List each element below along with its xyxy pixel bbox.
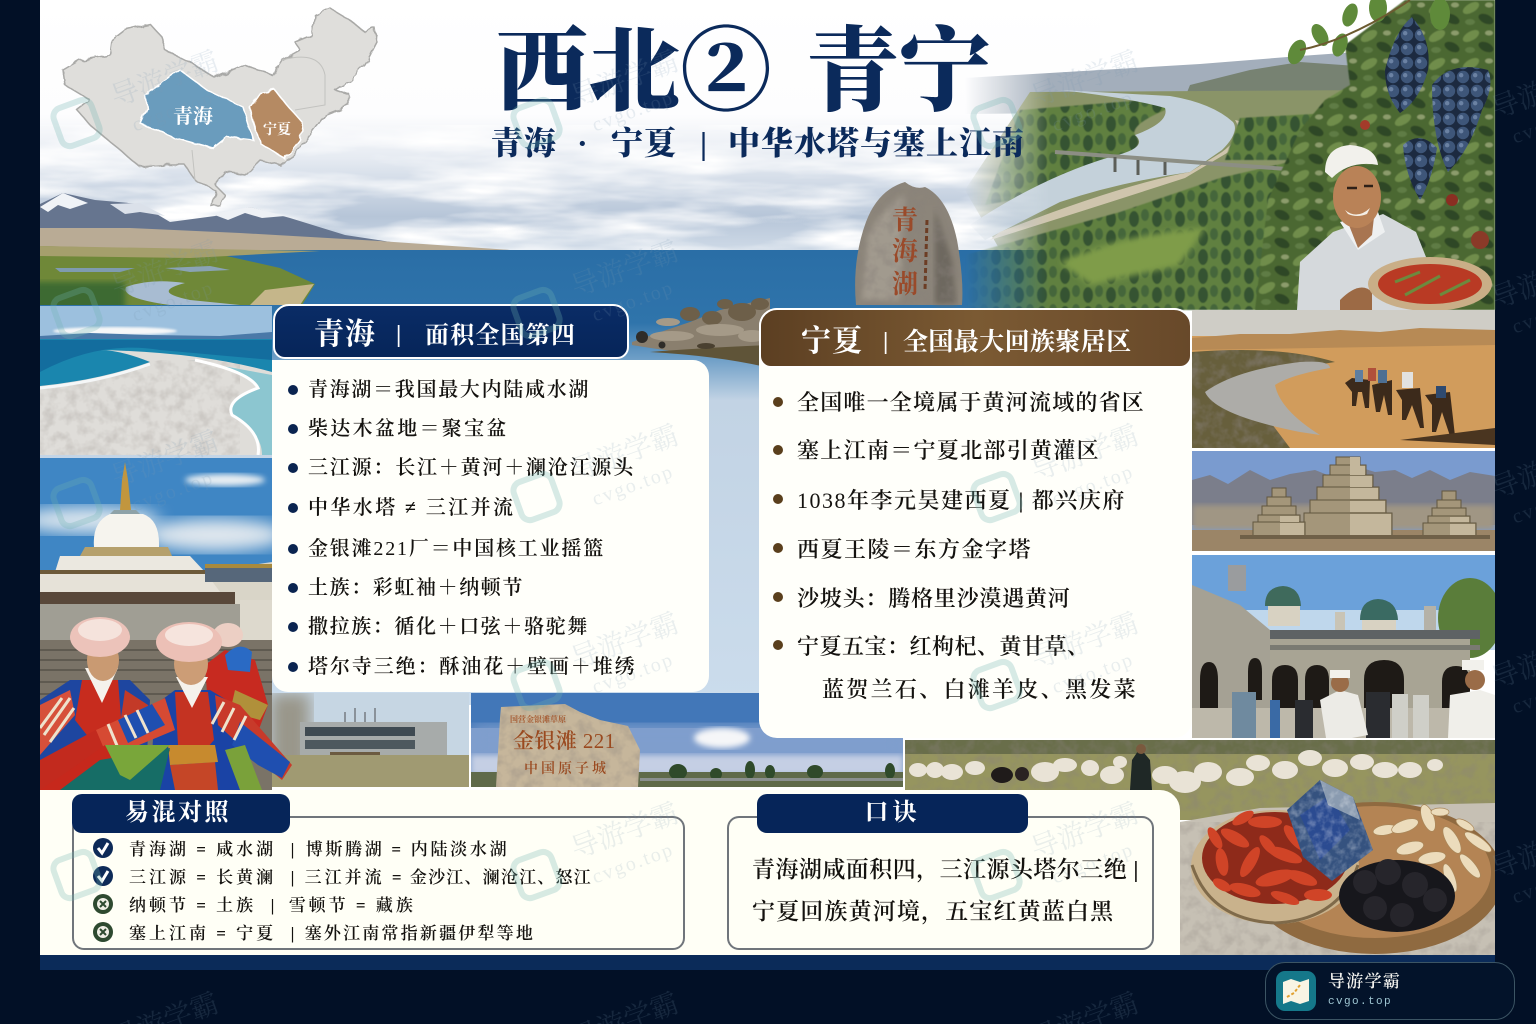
watermarks: cvgo.top [1049, 86, 1137, 136]
Qinghai list: 青海湖＝我国最大内陆咸水湖 [308, 379, 590, 401]
Ningxia list: 全国唯一全境属于黄河流域的省区 [797, 390, 1145, 415]
location map of China [63, 8, 377, 207]
watermarks: 导游学霸 [1027, 45, 1143, 113]
Qinghai header: 青海 [314, 318, 376, 351]
heading: confusable pairs: 易混对照 [125, 800, 231, 826]
comparison lines: 三江源 = 长黄澜 | 三江并流 = 金沙江、澜沧江、怒江 [129, 868, 592, 887]
stupa [55, 462, 205, 572]
photo: salt lake [40, 306, 272, 455]
stone monument: Qinghai Lake: 海 [892, 237, 918, 266]
watermarks: 导游学霸 [567, 419, 683, 487]
Ningxia region [250, 90, 303, 159]
panel: confusable pairs [72, 816, 685, 950]
icon: cross [93, 922, 113, 942]
watermarks: 导游学霸 [1027, 607, 1143, 675]
photo: Ta'er temple and Tu dancers [40, 458, 292, 790]
watermarks: 导游学霸 [567, 45, 683, 113]
watermarks: 导游学霸 [107, 45, 223, 113]
Qinghai list: 塔尔寺三绝：酥油花＋壁画＋堆绣 [308, 656, 636, 678]
Qinghai header [273, 304, 629, 359]
Qinghai panel body [272, 360, 709, 692]
subtitle: · [577, 125, 589, 161]
photo: desert, Yellow River and camels [1192, 310, 1495, 448]
grape clusters [1385, 17, 1429, 113]
comparison lines: 青海湖 = 咸水湖 | 博斯腾湖 = 内陆淡水湖 [129, 840, 509, 859]
watermarks: cvgo.top [589, 648, 677, 698]
watermarks: 导游学霸 [567, 235, 683, 303]
watermarks: 导游学霸 [107, 425, 223, 493]
Qinghai list: 土族：彩虹袖＋纳顿节 [308, 577, 524, 599]
title: 西北② [496, 21, 772, 123]
photo: 221 factory [272, 693, 469, 787]
subtitle: 青海 [491, 125, 557, 161]
stone monument: Qinghai Lake [850, 180, 965, 306]
subtitle [491, 125, 1025, 161]
title: 青宁 [807, 21, 991, 123]
watermarks: cvgo.top [1049, 648, 1137, 698]
panel: Qinghai [272, 304, 709, 692]
mnemonic text: 青海湖咸面积四，三江源头塔尔三绝 | [752, 857, 1139, 882]
heading: mnemonic [757, 794, 1028, 833]
Qinghai list: 中华水塔 ≠ 三江并流 [308, 497, 515, 519]
panel: Ningxia [759, 308, 1192, 738]
mnemonic text [752, 857, 1139, 924]
Qinghai list: 撒拉族：循化＋口弦＋骆驼舞 [308, 616, 589, 638]
comparison lines [129, 840, 592, 943]
watermarks: 导游学霸 [1027, 419, 1143, 487]
bottom navy strip [40, 955, 1495, 970]
photo: mosque and crowd [1192, 555, 1495, 738]
photo: Jinyintan stone: 国营金银滩草原 [510, 714, 567, 724]
shoreline rocks [632, 298, 770, 368]
Qinghai header: | [396, 322, 401, 348]
subtitle: 宁夏 [611, 125, 677, 161]
watermarks: 导游学霸 [1027, 797, 1143, 865]
photo: Western Xia mausoleums [1192, 451, 1495, 551]
heading: confusable pairs [72, 794, 290, 833]
comparison lines: 纳顿节 = 土族 | 雪顿节 = 藏族 [129, 896, 416, 915]
photo: sheep on grassland [905, 740, 1495, 820]
Ningxia list: 宁夏五宝：红枸杞、黄甘草、 [797, 634, 1090, 659]
Ningxia list: 蓝贺兰石、白滩羊皮、黑发菜 [822, 677, 1138, 702]
panel: mnemonic [727, 816, 1154, 950]
location map of China: 宁夏 [263, 121, 291, 138]
third dancer [205, 623, 268, 740]
brand url: cvgo.top [1328, 996, 1392, 1008]
watermarks: cvgo.top [589, 86, 677, 136]
stone monument: Qinghai Lake: 青 [892, 205, 918, 235]
watermarks: cvgo.top [589, 276, 677, 326]
cloudy sky [40, 0, 1100, 255]
Ningxia list: 1038年李元昊建西夏 | 都兴庆府 [797, 488, 1126, 513]
photo: five treasures of Ningxia [1180, 780, 1495, 955]
Qinghai header: 面积全国第四 [425, 323, 576, 349]
far snow mountains [40, 193, 510, 252]
mnemonic text: 宁夏回族黄河境，五宝红黄蓝白黑 [752, 899, 1114, 924]
stone monument: Qinghai Lake: 湖 [892, 270, 918, 299]
photo: Jinyintan stone: 中国原子城 [524, 760, 609, 777]
watermarks: cvgo.top [129, 86, 217, 136]
Ningxia header: 全国最大回族聚居区 [903, 329, 1132, 356]
farmer with goji basket [1297, 145, 1492, 311]
watermarks: 导游学霸 [567, 797, 683, 865]
Qinghai list: 三江源：长江＋黄河＋澜沧江源头 [308, 457, 635, 479]
grape vines [1255, 0, 1495, 310]
brand name: 导游学霸 [1328, 972, 1401, 991]
icon: cross [93, 894, 113, 914]
Ningxia header [759, 308, 1192, 368]
panel: bottom band [40, 790, 1180, 955]
photo: Jinyintan stone: 金银滩 221 [513, 729, 616, 753]
Ningxia list: 沙坡头：腾格里沙漠遇黄河 [797, 586, 1071, 611]
comparison lines: 塞上江南 = 宁夏 | 塞外江南常指新疆伊犁等地 [129, 924, 535, 943]
Ningxia list: 塞上江南＝宁夏北部引黄灌区 [797, 438, 1100, 463]
location map of China: 青海 [173, 105, 213, 128]
heading: mnemonic: 口诀 [864, 800, 920, 826]
Ningxia list [773, 390, 1145, 702]
watermarks: cvgo.top [589, 460, 677, 510]
Qinghai lake water [40, 250, 1070, 705]
Qinghai list: 金银滩221厂＝中国核工业摇篮 [308, 538, 605, 560]
watermarks: 导游学霸 [567, 607, 683, 675]
front dancer [40, 622, 292, 790]
grassland by the lake [40, 246, 320, 305]
Ningxia header: 宁夏 [801, 325, 863, 358]
photo: river valley with bridge [965, 50, 1385, 310]
subtitle: 中华水塔与塞上江南 [728, 125, 1025, 161]
icon: check [93, 838, 113, 858]
Qinghai region [140, 70, 253, 148]
Qinghai list [288, 378, 636, 678]
left dancer [40, 617, 150, 790]
Qinghai list: 柴达木盆地＝聚宝盆 [308, 418, 509, 440]
watermarks: 导游学霸 [107, 235, 223, 303]
icon: map logo [1276, 971, 1316, 1011]
watermarks: cvgo.top [1049, 838, 1137, 888]
watermarks: cvgo.top [129, 466, 217, 516]
Ningxia header: | [883, 329, 888, 355]
subtitle: | [700, 125, 708, 161]
icon: check [93, 866, 113, 886]
brand badge [1265, 962, 1515, 1020]
watermarks: cvgo.top [129, 276, 217, 326]
title [496, 21, 991, 123]
Ningxia list: 西夏王陵＝东方金字塔 [797, 537, 1032, 562]
watermarks: cvgo.top [1049, 460, 1137, 510]
photo: Jinyintan stone [471, 693, 903, 787]
watermarks: cvgo.top [589, 838, 677, 888]
